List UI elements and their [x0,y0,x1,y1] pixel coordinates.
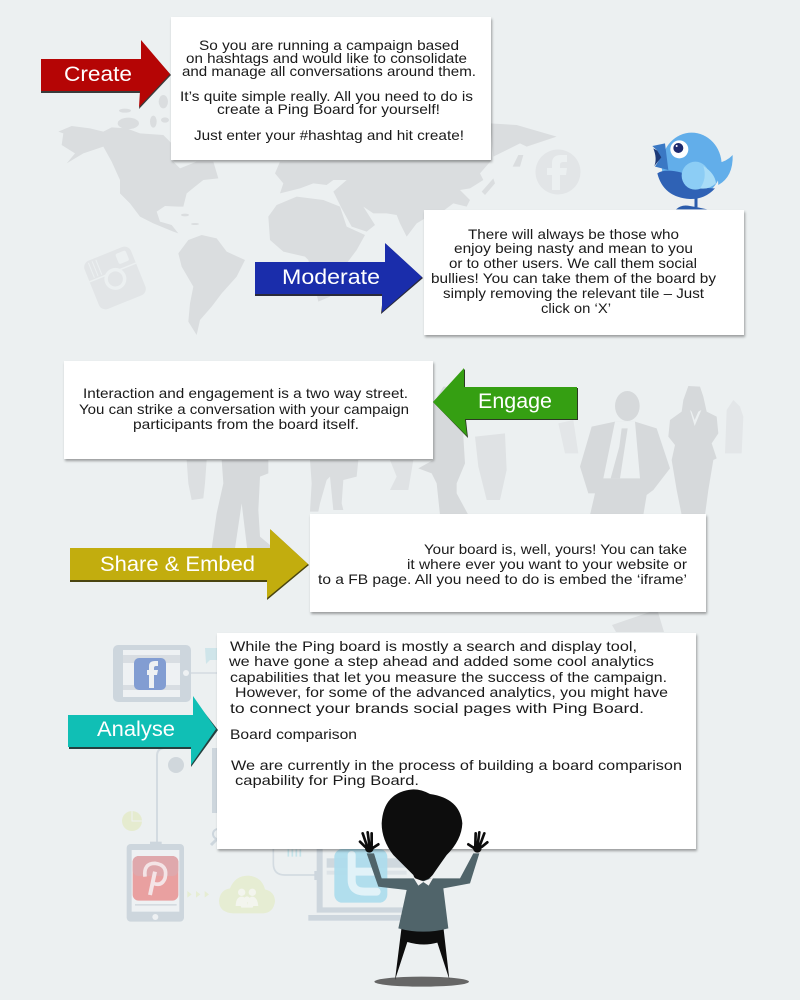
panel: Moderate text: enjoy being nasty and mean to you [454,240,693,256]
arrow: Share & Embed [70,529,309,600]
panel: Analyse text [217,633,696,849]
panel: Create text: Just enter your #hashtag and hit create! [194,127,464,143]
panel: Moderate text: or to other users. We call them social [449,255,697,271]
background: business people silhouettes, left group [187,387,507,550]
icon: faded Facebook circle [536,150,580,194]
panel: Analyse text: We are currently in the process of building a board comparison [231,757,682,773]
panel: Share & Embed text: it where ever you want to your website or [407,556,687,572]
legs [395,927,449,980]
background: faded Instagram fragment [612,612,664,632]
panel: Moderate text: simply removing the relevant tile – Just [443,285,704,301]
arrow: Moderate: Moderate [282,266,380,289]
figure: person with raised hands [360,789,487,987]
panel: Create text: on hashtags and would like to consolidate [186,50,467,66]
shadow [374,977,469,987]
collar [413,878,433,886]
arrow: Analyse [68,696,218,767]
panel: Analyse text: While the Ping board is mostly a search and display tool, [230,638,637,654]
arrow: Create: Create [64,63,132,86]
arrow: Analyse: Analyse [97,718,175,741]
panel: Analyse text: to connect your brands social pages with Ping Board. [230,700,644,716]
background: world map, Eurasia and Africa [268,123,557,302]
background: world map, Americas [58,95,245,335]
panel: Moderate text: There will always be those who [468,226,679,242]
panel: Share & Embed text: to a FB page. All you need to do is embed the ‘iframe’ [318,571,687,587]
panel: Analyse text: Board comparison [230,726,357,742]
panel: Share & Embed text [310,514,706,612]
background: business people silhouettes, right group [558,386,743,515]
icon: Pinterest tablet [127,842,184,922]
panel: Analyse text: capabilities that let you measure the success of the campaign. [230,669,667,685]
panel: Engage text: Interaction and engagement is a two way street. [83,385,408,401]
panel: Engage text: You can strike a conversation with your campaign [79,401,409,417]
panel: Analyse text: capability for Ping Board. [235,772,419,788]
panel: Create text: It’s quite simple really. All you need to do is [180,88,473,104]
panel: Moderate text: click on ‘X’ [541,300,611,316]
hands [360,832,487,853]
panel: Moderate text: bullies! You can take them of the board by [431,270,716,286]
panel: Moderate text [424,210,744,335]
panel: Share & Embed text: Your board is, well, yours! You can take [424,541,687,557]
arrow: Share & Embed: Share & Embed [100,553,255,576]
icon: blue bird [652,133,733,209]
background: faded social analytics diagram [113,645,408,922]
icon: Facebook tablet [113,645,191,702]
panel: Create text [171,17,491,160]
jacket and arms [367,853,479,932]
panel: Engage text: participants from the board itself. [133,416,359,432]
head [382,789,462,881]
icon: cloud with people [187,876,275,913]
panel: Engage text [64,361,433,459]
panel: Analyse text: However, for some of the advanced analytics, you might have [235,684,668,700]
arrow: Create [41,40,171,109]
icon: faded Instagram [82,245,148,311]
arrow: Engage [433,368,578,438]
icon: Twitter laptop [273,848,408,921]
panel: Create text: create a Ping Board for yourself! [217,101,440,117]
panel: Create text: So you are running a campaign based [199,37,459,53]
arrow: Moderate [255,243,423,314]
panel: Analyse text: we have gone a step ahead and added some cool analytics [228,653,654,669]
panel: Create text: and manage all conversations around them. [182,63,476,79]
arrow: Engage: Engage [478,390,552,413]
